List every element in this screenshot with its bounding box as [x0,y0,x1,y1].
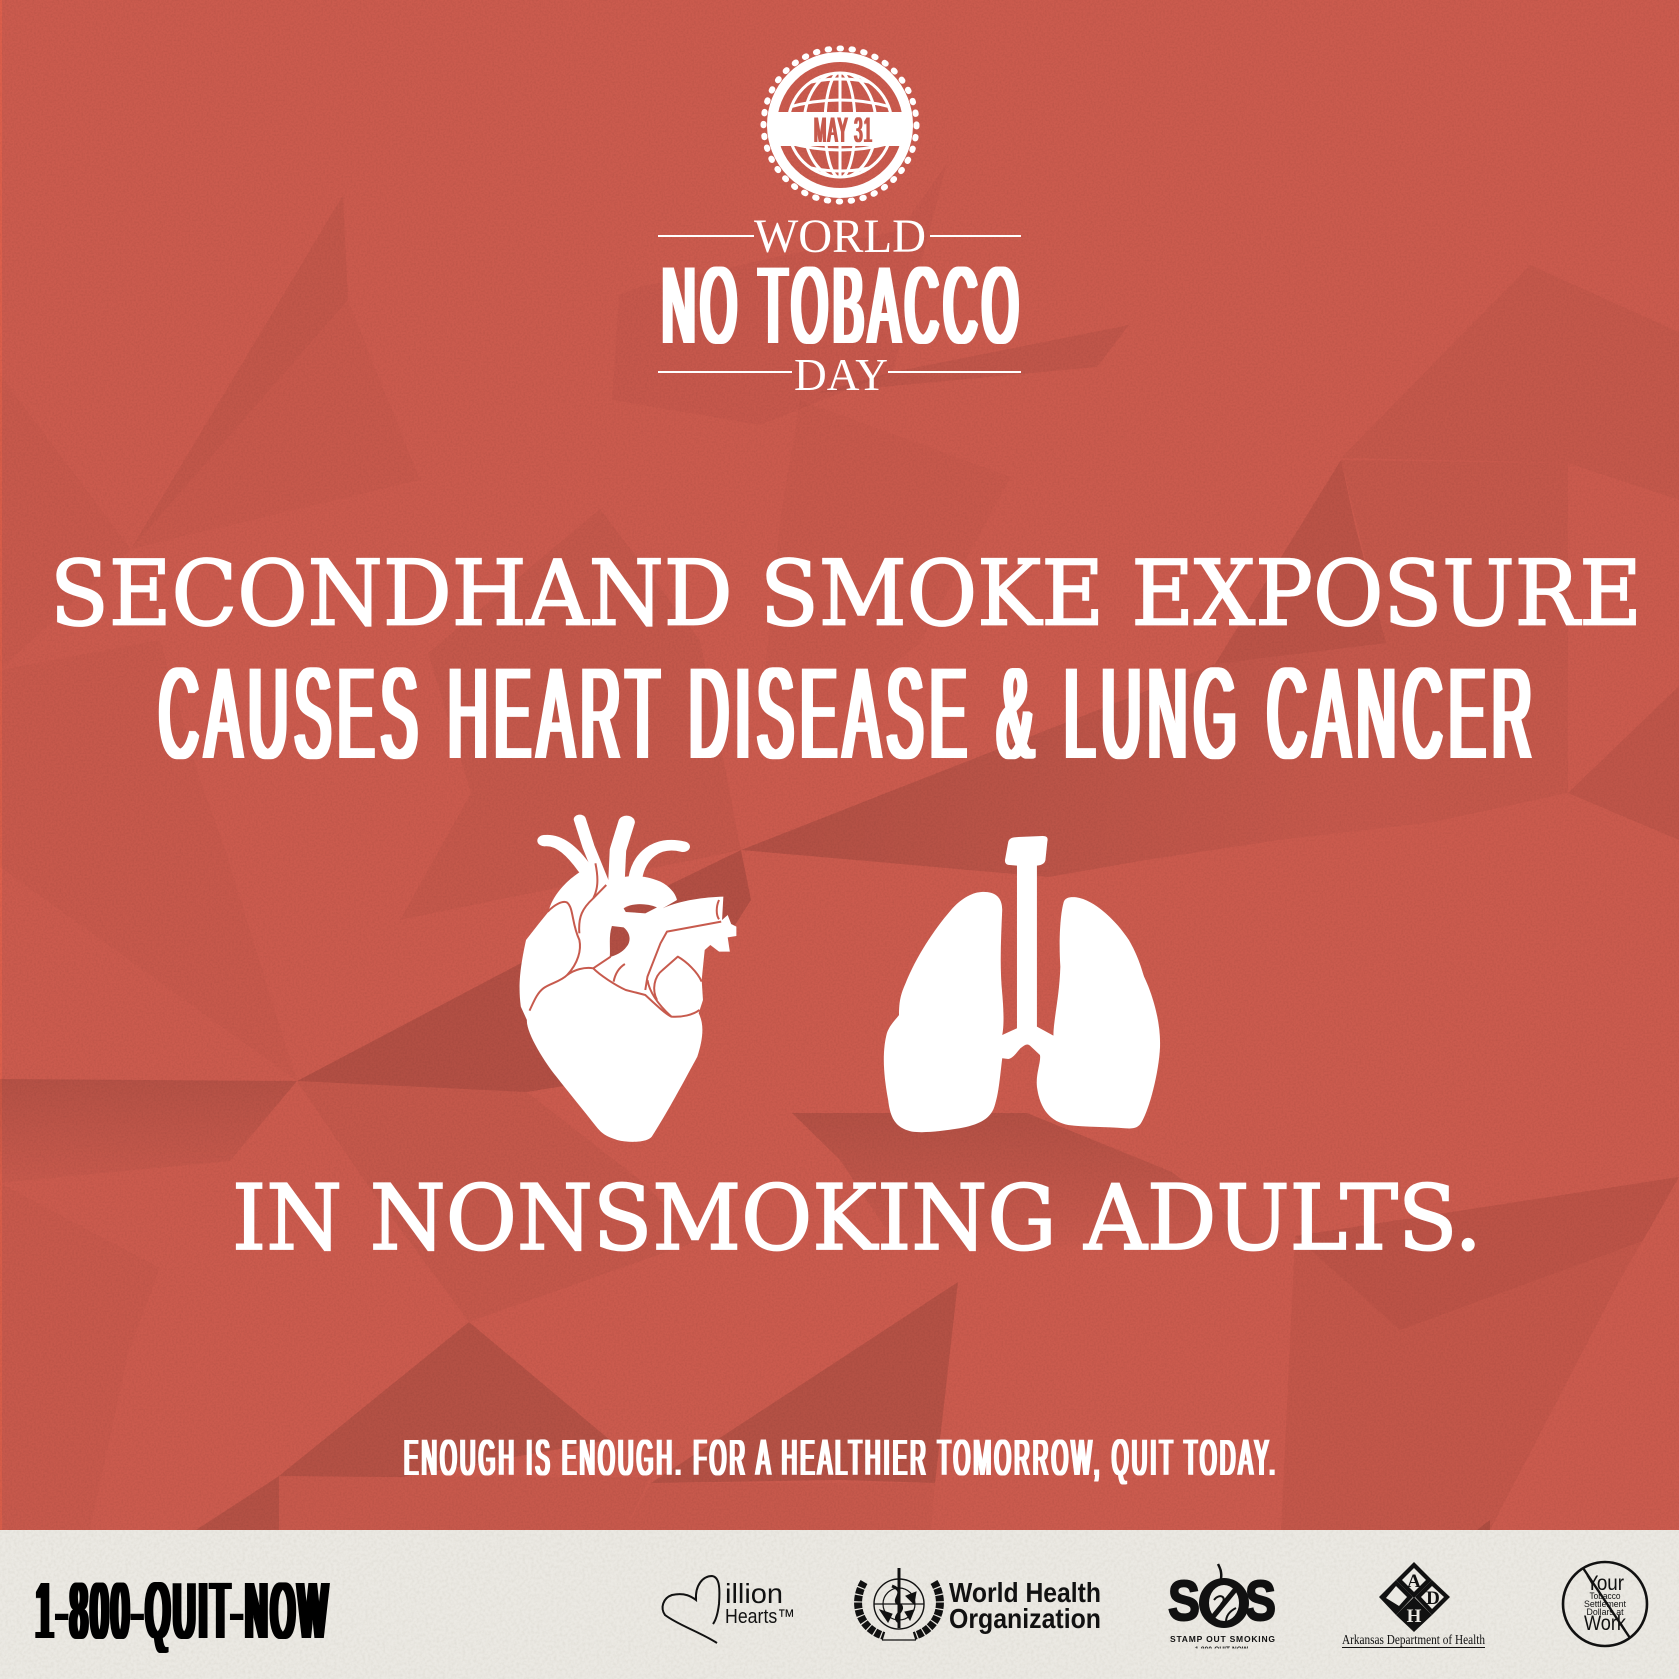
logo: Your Tobacco Settlement Dollars at Work: Work [1584,1612,1626,1635]
heading: causes heart disease and lung cancer: CAUSES HEART DISEASE & LUNG CANCER [159,642,1532,787]
icon: May 31 gear globe badge [764,48,916,202]
tagline: ENOUGH IS ENOUGH. FOR A HEALTHIER TOMORROW, QUIT TODAY. [404,1431,1275,1487]
title: World No Tobacco Day lockup: WORLD [754,210,926,263]
logo: Your Tobacco Settlement Dollars at Work: Dollars at [1586,1607,1624,1617]
logo: Arkansas Department of Health [1342,1562,1485,1648]
logo: Arkansas Department of Health: D [1426,1588,1440,1609]
logo: Stamp Out Smoking: 1-800-QUIT-NOW [1195,1646,1249,1653]
logo: Stamp Out Smoking: S [1168,1569,1200,1633]
logo: Stamp Out Smoking: S [1245,1569,1276,1633]
logo: Arkansas Department of Health: H [1407,1606,1422,1627]
logo: Million Hearts [663,1576,795,1643]
logo: World Health Organization [858,1568,1101,1640]
icon: anatomical heart [520,819,736,1142]
title: World No Tobacco Day lockup [658,210,1021,400]
logo: Arkansas Department of Health: A [1407,1571,1421,1592]
logo: Stamp Out Smoking: STAMP OUT SMOKING [1170,1634,1275,1644]
logo: World Health Organization: World Health [949,1577,1101,1608]
icon: lungs and trachea [884,836,1160,1132]
footer paper band [0,1530,1679,1679]
logo: Arkansas Department of Health: Arkansas Department of Health [1342,1633,1485,1648]
logo: Stamp Out Smoking [1168,1564,1276,1653]
logo: Your Tobacco Settlement Dollars at Work: Tobacco [1590,1591,1620,1601]
logo: Your Tobacco Settlement Dollars at Work: Settlement [1584,1599,1626,1609]
logo: Million Hearts: Hearts™ [725,1606,795,1628]
badge date text: MAY 31 [814,111,872,150]
logo: Million Hearts: illion [725,1578,783,1609]
heading: secondhand smoke exposure: SECONDHAND SMOKE EXPOSURE [50,542,1642,646]
title: World No Tobacco Day lockup: NO TOBACCO [662,244,1018,366]
logo: Your Tobacco Settlement Dollars at Work [1563,1562,1647,1646]
title: World No Tobacco Day lockup: DAY [794,349,888,400]
heading: in nonsmoking adults: IN NONSMOKING ADULTS. [232,1166,1482,1271]
WHO emblem [858,1568,940,1640]
quitline phone number: 1-800-QUIT-NOW [36,1565,327,1655]
logo: Your Tobacco Settlement Dollars at Work: Your [1586,1572,1624,1595]
logo: World Health Organization: Organization [949,1603,1101,1634]
